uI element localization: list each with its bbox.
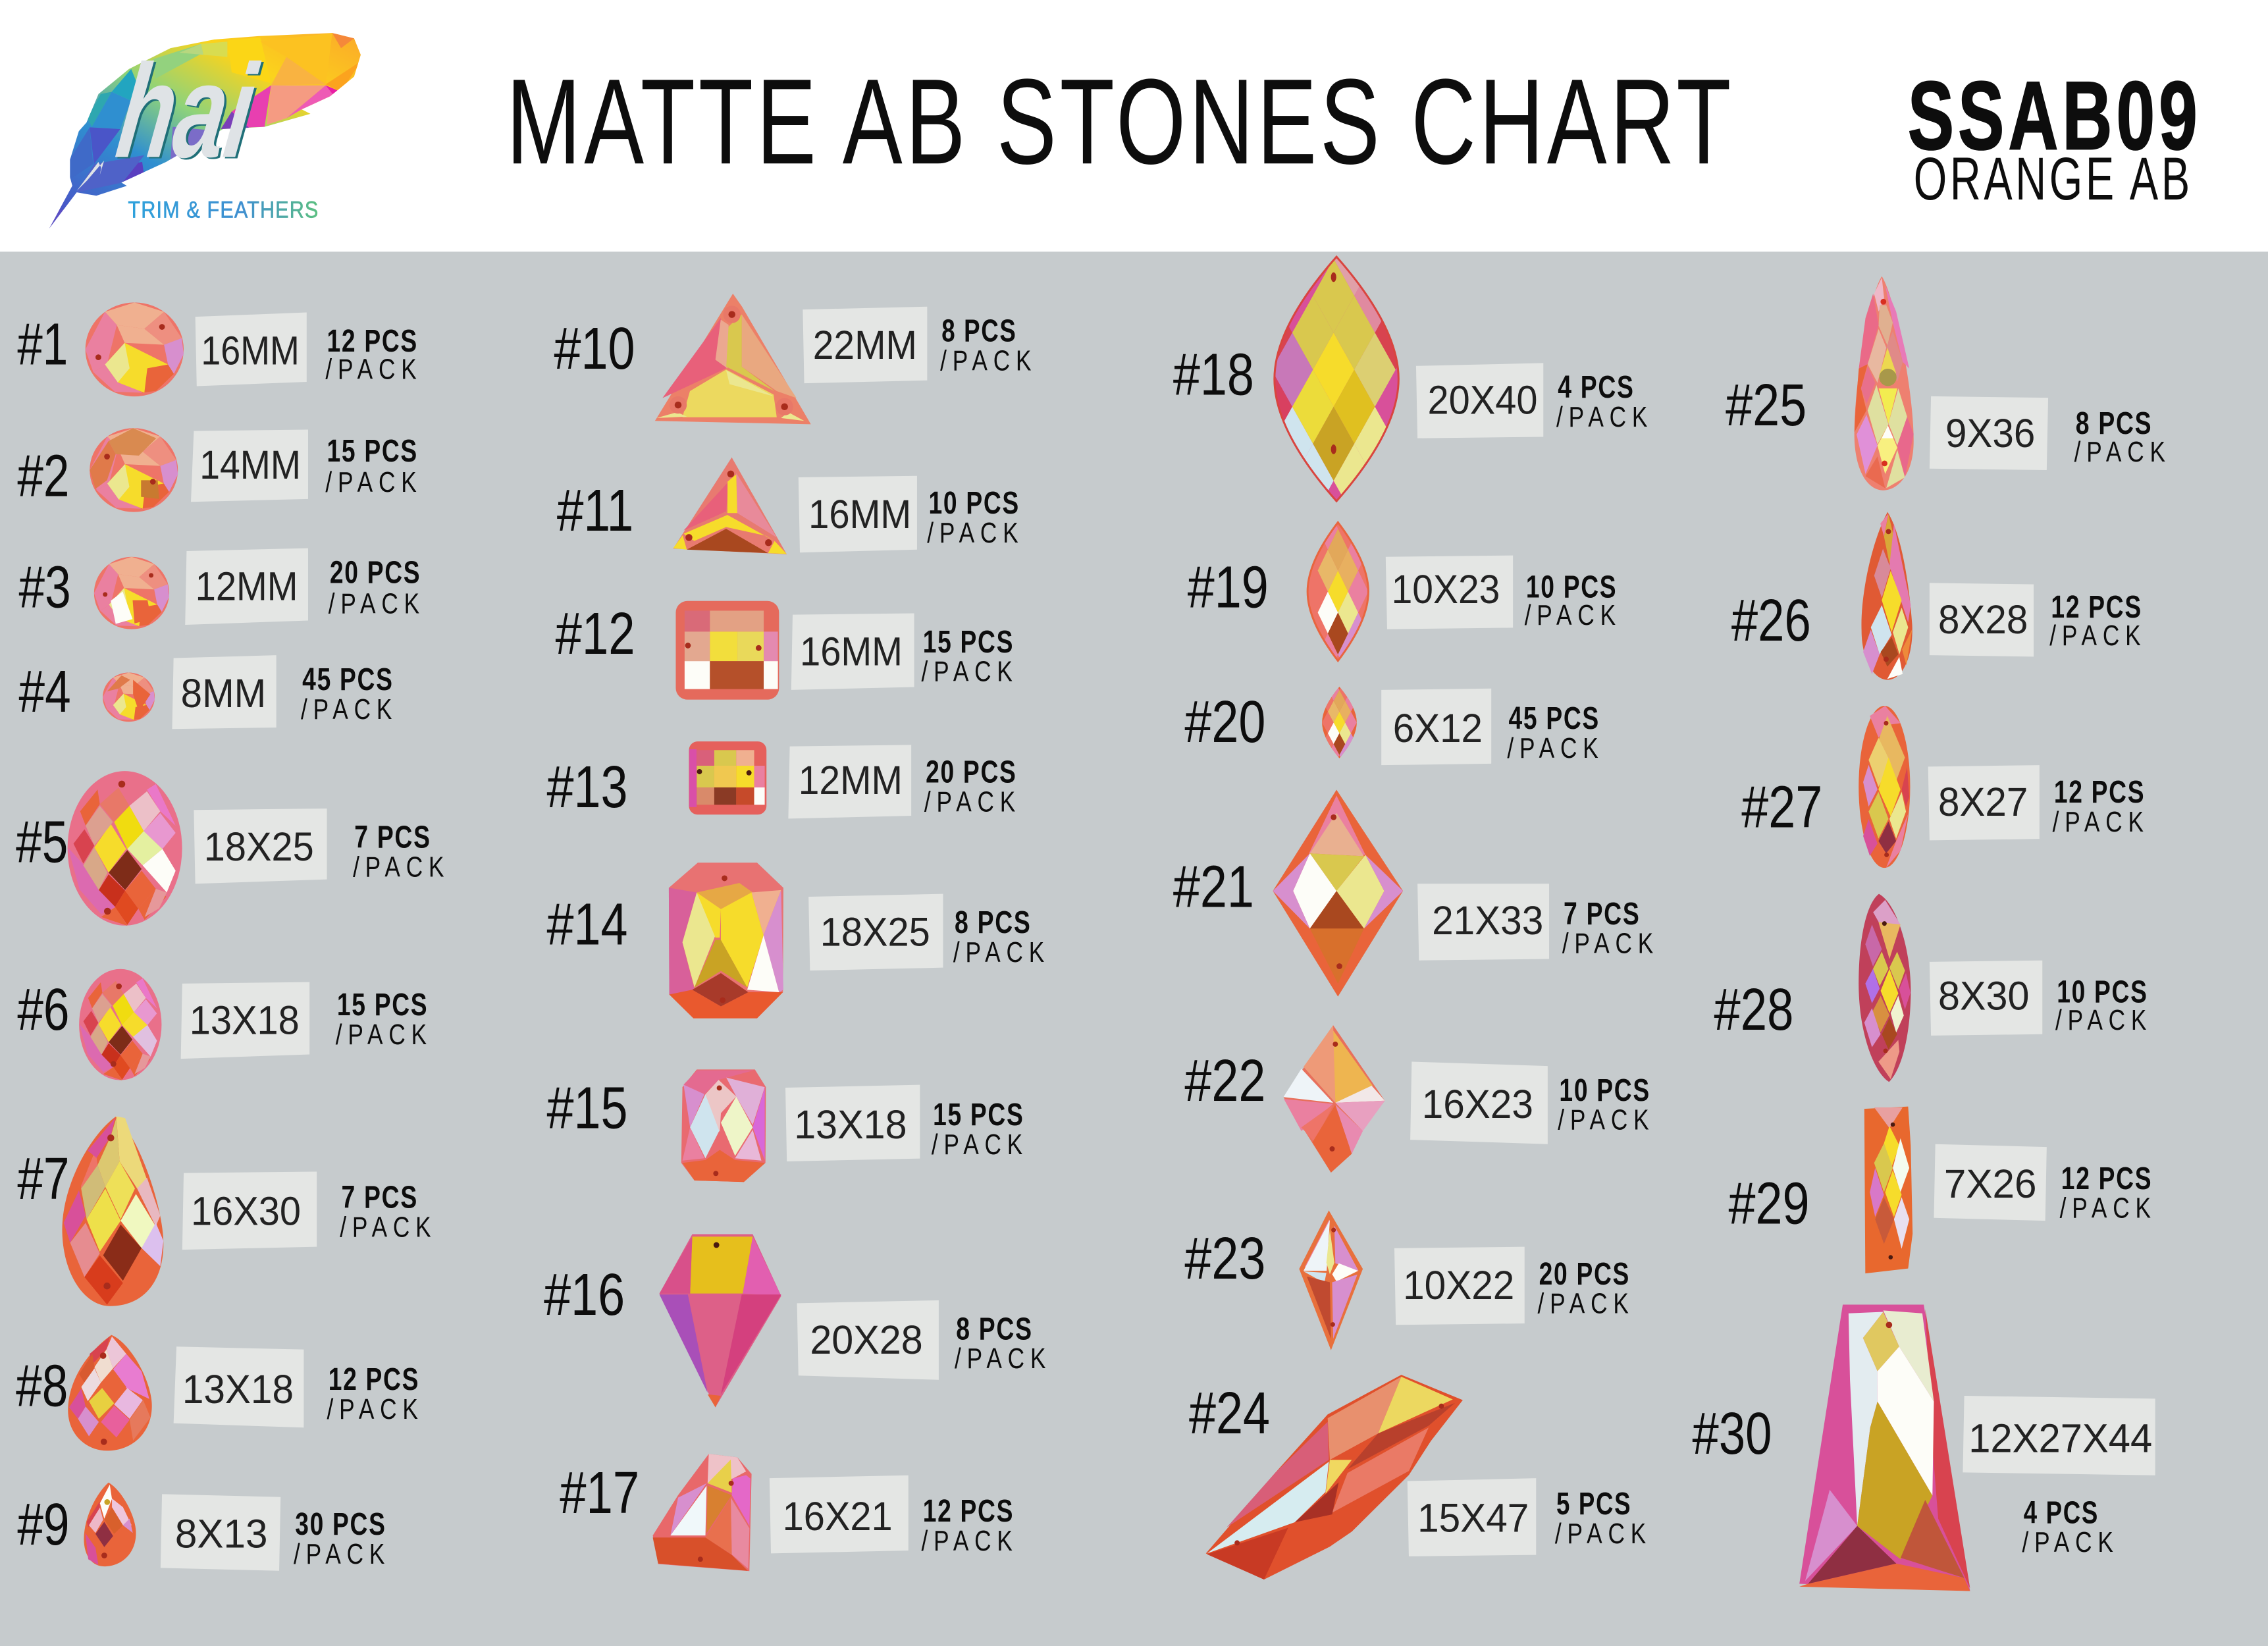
pack count #25 (2074, 406, 2171, 468)
size card #11 (799, 476, 917, 552)
label #8: #8 (16, 1352, 68, 1419)
pack count #23 (1537, 1256, 1635, 1320)
pack count #30 (2022, 1495, 2119, 1558)
size card #5 (194, 809, 327, 884)
stone #9 drop (84, 1483, 136, 1566)
pack count #23: 20 PCS (1539, 1256, 1630, 1292)
label #21: #21 (1173, 853, 1254, 920)
pack count #21: 7 PCS (1564, 896, 1640, 932)
pack count #3 (329, 554, 425, 620)
size card #30: 12X27X44 (1968, 1416, 2152, 1462)
size card #28: 8X30 (1938, 973, 2029, 1019)
size card #24: 15X47 (1417, 1495, 1529, 1541)
item #26 (1731, 512, 2146, 680)
size card #14: 18X25 (820, 910, 930, 955)
size card #16: 20X28 (810, 1317, 923, 1363)
pack count #26 (2049, 589, 2146, 652)
item #20 (1185, 687, 1598, 765)
item #22 (1184, 1025, 1654, 1173)
pack count #9 (294, 1506, 390, 1570)
pack count #15: 15 PCS (933, 1097, 1024, 1132)
label #23: #23 (1184, 1225, 1265, 1292)
pack count #6: 15 PCS (337, 987, 428, 1022)
size card #14 (808, 894, 943, 970)
pack count #7 (340, 1179, 437, 1243)
pack count #27: 12 PCS (2054, 774, 2145, 810)
stone #28 navette (1859, 894, 1911, 1082)
stone #18 navette (1273, 255, 1400, 503)
pack count #11: /PACK (927, 517, 1024, 549)
size card #12: 16MM (800, 629, 903, 675)
pack count #28: /PACK (2055, 1004, 2152, 1036)
size card #22: 16X23 (1422, 1082, 1533, 1127)
size card #3: 12MM (196, 564, 298, 610)
item #15 (546, 1069, 1028, 1182)
size card #25: 9X36 (1945, 411, 2035, 456)
size card #26 (1930, 583, 2034, 656)
size card #4: 8MM (181, 671, 266, 716)
pack count #30: 4 PCS (2024, 1495, 2099, 1530)
size card #1 (196, 313, 307, 386)
pack count #19: /PACK (1525, 599, 1622, 631)
size card #23 (1394, 1247, 1525, 1325)
pack count #13 (924, 754, 1021, 818)
stone #23 kite (1299, 1210, 1363, 1350)
size card #29: 7X26 (1944, 1161, 2036, 1207)
pack count #22: 10 PCS (1559, 1073, 1650, 1108)
label #20: #20 (1184, 689, 1265, 755)
label #15: #15 (546, 1075, 628, 1142)
item #24 (1189, 1375, 1652, 1580)
label #25: #25 (1726, 372, 1806, 438)
stone #27 oval (1859, 706, 1910, 868)
item #29 (1728, 1107, 2157, 1273)
item #19 (1188, 521, 1616, 662)
size card #8 (174, 1346, 303, 1427)
label #16: #16 (544, 1261, 625, 1328)
item #8 (16, 1335, 424, 1450)
stone #1 round (86, 302, 184, 396)
item #5 (16, 771, 450, 926)
label #27: #27 (1741, 774, 1822, 841)
pack count #24: 5 PCS (1556, 1486, 1631, 1522)
stone #11 triangle (673, 458, 787, 554)
pack count #1: /PACK (325, 354, 423, 386)
size card #6 (181, 982, 309, 1059)
size card #3 (185, 548, 308, 625)
pack count #12: /PACK (922, 656, 1018, 688)
stone #29 tapered bar (1864, 1107, 1912, 1273)
pack count #21: /PACK (1562, 928, 1659, 960)
size card #26: 8X28 (1938, 597, 2028, 643)
pack count #2: 15 PCS (327, 433, 418, 469)
item #12 (556, 600, 1018, 700)
stone #22 star rhombus (1283, 1025, 1385, 1173)
item #25 (1726, 277, 2171, 491)
item #21 (1173, 789, 1659, 997)
size card #8: 13X18 (182, 1367, 294, 1412)
label #19: #19 (1188, 554, 1269, 621)
item #13 (546, 741, 1021, 820)
size card #16 (797, 1300, 939, 1380)
pack count #13: 20 PCS (926, 754, 1017, 789)
stone #19 navette (1306, 521, 1369, 662)
stone #20 navette (1322, 687, 1357, 758)
pack count #1 (325, 323, 423, 386)
label #13: #13 (546, 754, 628, 820)
pack count #28: 10 PCS (2057, 974, 2148, 1009)
size card #30 (1963, 1396, 2155, 1475)
label #17: #17 (560, 1460, 639, 1526)
stone #12 square (675, 601, 779, 700)
pack count #12: 15 PCS (923, 624, 1014, 660)
size card #21: 21X33 (1432, 898, 1543, 943)
pack count #6 (336, 987, 433, 1051)
stone #25 teardrop (1855, 277, 1914, 491)
size card #23: 10X22 (1403, 1263, 1514, 1308)
pack count #3: 20 PCS (330, 554, 421, 590)
pack count #15: /PACK (932, 1128, 1028, 1161)
size card #20 (1381, 689, 1491, 765)
size card #22 (1410, 1061, 1548, 1144)
pack count #25: /PACK (2074, 436, 2171, 468)
size card #18: 20X40 (1428, 377, 1537, 423)
label #5: #5 (16, 809, 68, 875)
pack count #16: 8 PCS (956, 1311, 1033, 1346)
pack count #26: /PACK (2049, 620, 2146, 652)
label #24: #24 (1189, 1380, 1270, 1447)
pack count #13: /PACK (924, 785, 1021, 818)
label #29: #29 (1728, 1171, 1810, 1237)
size card #9 (161, 1494, 280, 1571)
size card #6: 13X18 (190, 998, 300, 1044)
pack count #16 (955, 1311, 1051, 1375)
pack count #19 (1525, 569, 1622, 631)
label #18: #18 (1173, 342, 1254, 408)
pack count #8 (327, 1362, 424, 1425)
stone #26 teardrop (1861, 512, 1912, 680)
pack count #22: /PACK (1558, 1104, 1654, 1136)
pack count #25: 8 PCS (2076, 406, 2152, 441)
size card #1: 16MM (201, 329, 300, 374)
logo: hai trim and feathers (43, 29, 369, 228)
pack count #20: 45 PCS (1509, 701, 1600, 736)
label #2: #2 (17, 443, 69, 510)
pack count #28 (2055, 974, 2152, 1036)
item #9 (17, 1483, 390, 1571)
item #1 (17, 302, 423, 396)
pack count #10: 8 PCS (941, 313, 1017, 348)
stone #14 octagon (669, 863, 783, 1019)
pack count #29: /PACK (2060, 1192, 2157, 1225)
pack count #27: /PACK (2053, 806, 2149, 838)
size card #24 (1408, 1478, 1536, 1556)
pack count #19: 10 PCS (1526, 569, 1617, 604)
stone #4 round (103, 673, 155, 722)
logo wordmark: hai (112, 38, 267, 187)
pack count #10 (940, 313, 1037, 377)
pack count #15 (932, 1097, 1028, 1161)
pack count #17: /PACK (922, 1525, 1018, 1557)
pack count #11 (927, 485, 1024, 549)
size card #7 (182, 1171, 317, 1250)
stone #17 faceted (653, 1454, 752, 1571)
pack count #30: /PACK (2022, 1526, 2119, 1558)
item #10 (554, 294, 1037, 424)
stone #16 kite (660, 1234, 781, 1408)
item #17 (560, 1454, 1018, 1571)
pack count #8: 12 PCS (329, 1362, 419, 1397)
pack count #5: /PACK (353, 851, 450, 883)
label #9: #9 (17, 1491, 69, 1558)
pack count #18: /PACK (1556, 401, 1653, 433)
label #26: #26 (1731, 587, 1811, 654)
stone #7 drop (62, 1117, 163, 1306)
size card #17 (770, 1475, 909, 1553)
size card #20: 6X12 (1393, 706, 1483, 751)
pack count #17 (922, 1493, 1018, 1557)
stone #15 octagon (681, 1069, 766, 1182)
pack count #21 (1562, 896, 1659, 960)
pack count #3: /PACK (329, 587, 425, 620)
pack count #4: /PACK (301, 693, 398, 726)
item #27 (1741, 706, 2149, 868)
pack count #7: 7 PCS (342, 1179, 418, 1215)
pack count #8: /PACK (327, 1393, 424, 1425)
pack count #2 (325, 433, 423, 498)
size card #21 (1417, 884, 1549, 961)
pack count #18 (1556, 369, 1653, 433)
pack count #7: /PACK (340, 1211, 437, 1243)
size card #13: 12MM (799, 758, 903, 803)
stone #5 oval (68, 771, 182, 926)
label #12: #12 (556, 600, 635, 667)
header band (0, 0, 2268, 252)
item #6 (17, 969, 433, 1080)
stone #30 trapezoid (1799, 1305, 1970, 1591)
pack count #4 (301, 662, 398, 726)
logo tagline: TRIM & FEATHERS (128, 198, 319, 223)
pack count #12 (922, 624, 1018, 688)
size card #11: 16MM (808, 492, 911, 537)
pack count #26: 12 PCS (2051, 589, 2142, 625)
pack count #20 (1507, 701, 1604, 764)
size card #9: 8X13 (175, 1512, 267, 1557)
size card #10 (803, 307, 927, 383)
pack count #9: /PACK (294, 1538, 390, 1570)
size card #18 (1416, 363, 1543, 438)
size card #5: 18X25 (204, 824, 314, 870)
item #18 (1173, 222, 1653, 518)
item #30 (1693, 1305, 2155, 1591)
logo wordmark: hai (109, 37, 265, 186)
size card #27 (1928, 765, 2040, 840)
label #22: #22 (1184, 1048, 1265, 1114)
label #3: #3 (19, 554, 71, 621)
pack count #10: /PACK (940, 344, 1037, 377)
label #11: #11 (557, 477, 633, 544)
stone #10 triangle (655, 294, 811, 424)
item #4 (19, 655, 398, 729)
pack count #22 (1558, 1073, 1654, 1136)
pack count #18: 4 PCS (1558, 369, 1635, 405)
item #23 (1184, 1210, 1635, 1350)
item #14 (546, 863, 1050, 1019)
pack count #17: 12 PCS (923, 1493, 1014, 1529)
size card #2 (191, 429, 308, 502)
item #2 (17, 428, 423, 512)
pack count #16: /PACK (955, 1342, 1051, 1375)
pack count #24: /PACK (1555, 1518, 1652, 1550)
pack count #5 (353, 819, 450, 883)
size card #13 (788, 745, 911, 818)
label #6: #6 (17, 976, 69, 1043)
size card #12 (791, 613, 914, 690)
stone #3 round (94, 557, 169, 629)
pack count #2: /PACK (325, 466, 423, 498)
pack count #1: 12 PCS (327, 323, 418, 359)
size card #15: 13X18 (794, 1102, 907, 1148)
label #1: #1 (17, 311, 68, 378)
pack count #14: /PACK (953, 936, 1050, 969)
stone #24 long facet (1206, 1375, 1463, 1580)
pack count #23: /PACK (1537, 1288, 1635, 1320)
pack count #5: 7 PCS (354, 819, 431, 855)
item #28 (1714, 894, 2152, 1082)
label #4: #4 (19, 658, 71, 725)
stone #13 square (689, 741, 766, 814)
label #10: #10 (554, 315, 635, 382)
item #16 (544, 1234, 1051, 1408)
pack count #27 (2053, 774, 2149, 838)
pack count #14 (953, 905, 1050, 969)
size card #17: 16X21 (783, 1494, 893, 1539)
size card #4 (172, 655, 277, 729)
size card #25 (1930, 396, 2048, 470)
size card #19 (1386, 556, 1513, 629)
label #7: #7 (17, 1146, 69, 1212)
pack count #11: 10 PCS (929, 485, 1020, 521)
label #14: #14 (546, 891, 628, 958)
item #3 (19, 548, 425, 629)
item #7 (17, 1117, 437, 1306)
label #28: #28 (1714, 976, 1793, 1043)
size card #10: 22MM (813, 323, 917, 368)
pack count #6: /PACK (336, 1019, 433, 1051)
stone #6 oval (79, 969, 161, 1080)
size card #28 (1930, 961, 2042, 1036)
pack count #4: 45 PCS (302, 662, 394, 697)
size card #19: 10X23 (1392, 567, 1500, 612)
pack count #14: 8 PCS (955, 905, 1032, 940)
size card #7: 16X30 (191, 1189, 301, 1234)
pack count #20: /PACK (1507, 732, 1604, 764)
size card #29 (1934, 1144, 2047, 1221)
stone #2 round (90, 428, 178, 512)
stone #8 drop (68, 1335, 152, 1450)
size card #2: 14MM (199, 442, 301, 488)
item #11 (557, 458, 1024, 554)
pack count #29: 12 PCS (2061, 1161, 2152, 1196)
pack count #29 (2060, 1161, 2157, 1225)
stone #21 rhombus (1273, 789, 1403, 997)
title: MATTE AB STONES CHART (506, 54, 1734, 190)
label #30: #30 (1693, 1400, 1772, 1467)
pack count #24 (1555, 1486, 1652, 1550)
size card #15 (785, 1085, 920, 1161)
pack count #9: 30 PCS (295, 1506, 386, 1542)
size card #27: 8X27 (1938, 780, 2028, 825)
